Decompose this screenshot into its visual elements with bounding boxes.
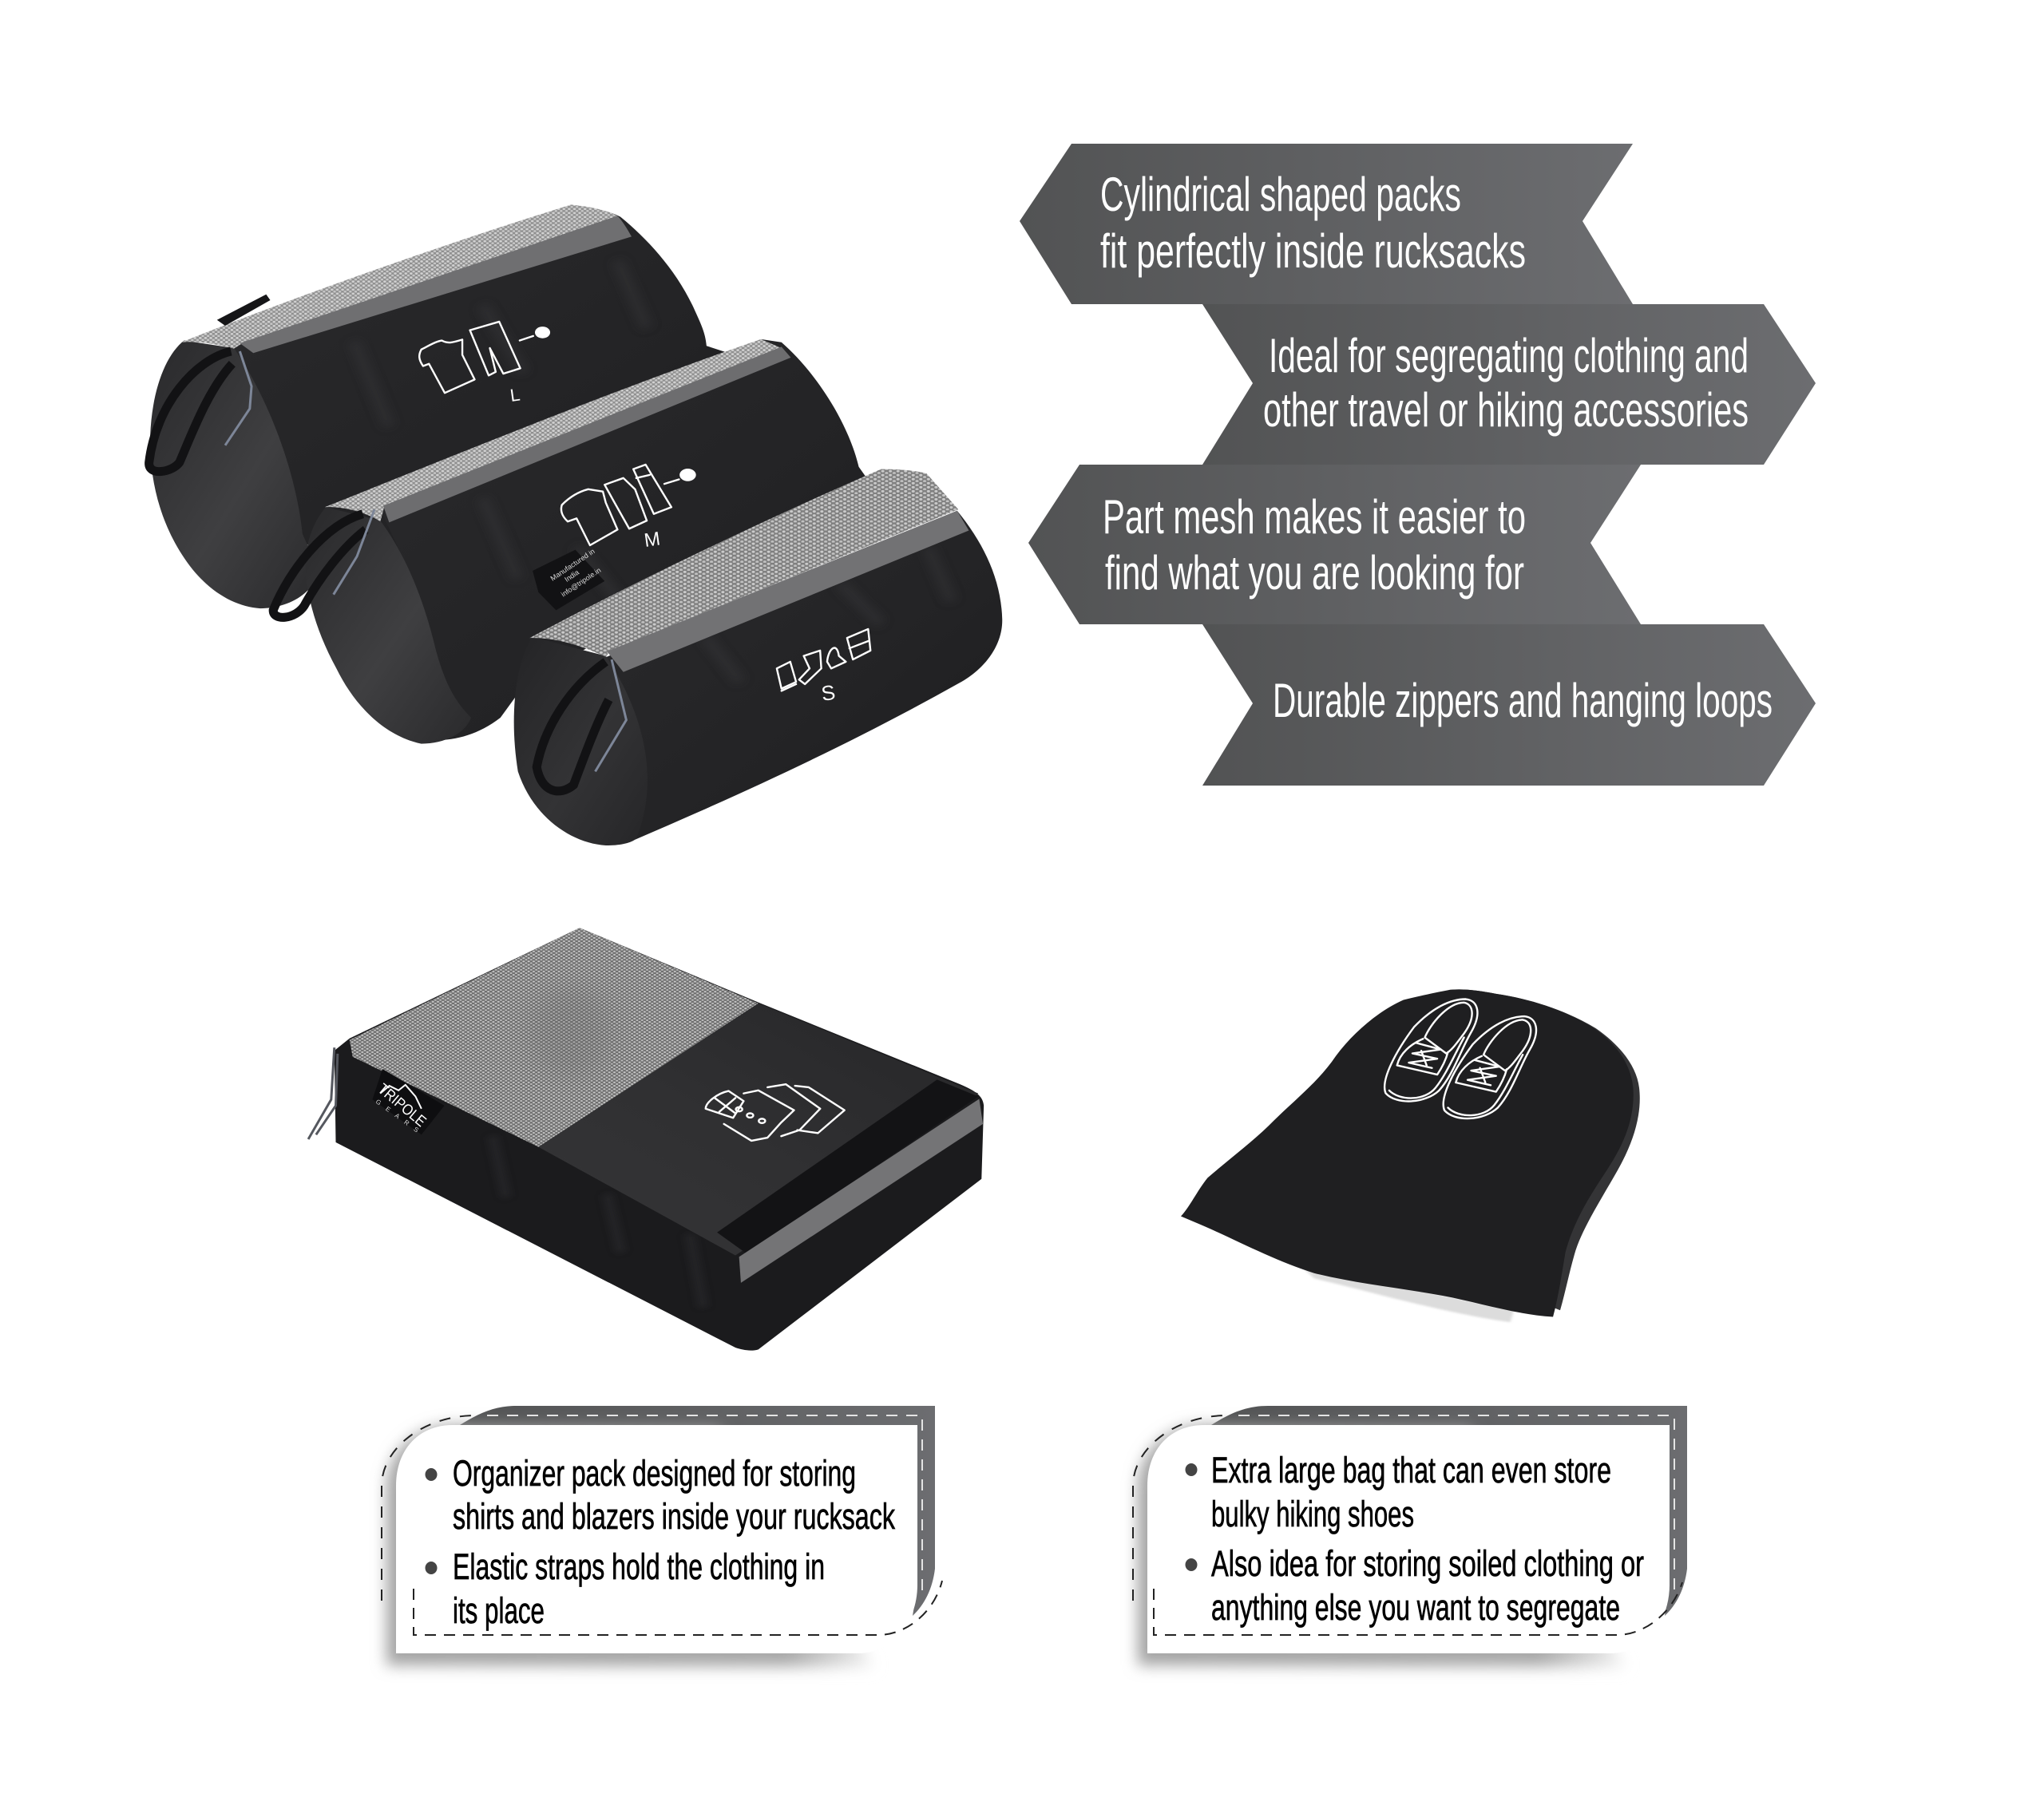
arrow 1 bbox=[1020, 144, 1633, 304]
organizer dark top bbox=[538, 1004, 978, 1255]
organizer mesh shade bbox=[529, 987, 612, 1078]
callout panel bbox=[396, 1425, 917, 1653]
arrow 3: Part mesh makes it easier to bbox=[1103, 490, 1526, 544]
callout: organizer: its place bbox=[453, 1590, 545, 1631]
photo: organizer pack bbox=[308, 928, 984, 1351]
callout: organizer: shirts and blazers inside your rucksack bbox=[453, 1496, 895, 1537]
bag S icons bbox=[777, 629, 870, 691]
size label M: M bbox=[643, 528, 662, 552]
shoe left bbox=[1384, 1000, 1477, 1101]
arrow 4 bbox=[1202, 624, 1816, 786]
bag M tag bbox=[533, 550, 604, 610]
organizer tag brand: TRIPOLE bbox=[374, 1081, 429, 1130]
bag L body bbox=[149, 204, 775, 608]
callout: shoe bag: anything else you want to segregate bbox=[1211, 1587, 1620, 1628]
bag M icons bbox=[561, 465, 696, 545]
shoe bag body bbox=[1181, 989, 1634, 1317]
organizer tag sub-brand: GEARS bbox=[374, 1098, 426, 1138]
size label L: L bbox=[509, 384, 521, 406]
organizer mesh bbox=[350, 928, 759, 1147]
bag S body bbox=[514, 469, 1002, 845]
organizer shirt icon bbox=[706, 1084, 845, 1141]
callout: shoe bag bbox=[1133, 1406, 1687, 1667]
photo: three cylindrical packs bbox=[149, 204, 1002, 845]
callout band bbox=[460, 1406, 935, 1616]
tag text: info@tripole.in bbox=[560, 566, 602, 599]
organizer cord bbox=[308, 1047, 338, 1139]
tag text: India bbox=[563, 568, 580, 584]
callout shadow bbox=[1138, 1425, 1626, 1667]
arrow 2: other travel or hiking accessories bbox=[1263, 383, 1749, 437]
arrow 4: Durable zippers and hanging loops bbox=[1273, 674, 1773, 727]
arrow 3 bbox=[1028, 465, 1641, 624]
callout: organizer: Elastic straps hold the clothing in bbox=[453, 1546, 825, 1587]
organizer elastic strap bbox=[717, 1079, 978, 1254]
organizer front creases bbox=[493, 1136, 703, 1308]
bag L icons bbox=[419, 322, 550, 393]
callout: shoe bag: bulky hiking shoes bbox=[1211, 1494, 1414, 1534]
callout: shoe bag: Extra large bag that can even store bbox=[1211, 1450, 1611, 1490]
arrow 3: find what you are looking for bbox=[1105, 546, 1524, 600]
photo: shoe bag bbox=[1181, 989, 1640, 1322]
organizer tag bbox=[372, 1069, 445, 1134]
arrow 2 bbox=[1202, 304, 1816, 465]
bag M body bbox=[273, 339, 881, 744]
callout band bbox=[1211, 1406, 1687, 1616]
shoe bag floor shade bbox=[1300, 1265, 1514, 1322]
organizer silhouette bbox=[335, 928, 984, 1351]
tag text: Manufactured in bbox=[549, 547, 596, 583]
shoe right bbox=[1444, 1016, 1536, 1118]
callout panel bbox=[1147, 1425, 1670, 1653]
callout: shoe bag: Also idea for storing soiled clothing or bbox=[1211, 1543, 1644, 1584]
callout shadow bbox=[386, 1425, 874, 1667]
arrow 1: Cylindrical shaped packs bbox=[1100, 168, 1461, 221]
shoe bag side bbox=[1407, 989, 1640, 1310]
callout: organizer: Organizer pack designed for storing bbox=[453, 1453, 856, 1494]
organizer zipper band bbox=[739, 1099, 983, 1283]
size label S: S bbox=[820, 680, 837, 706]
arrow 2: Ideal for segregating clothing and bbox=[1269, 329, 1749, 382]
callout: organizer bbox=[382, 1406, 942, 1667]
arrow 1: fit perfectly inside rucksacks bbox=[1100, 224, 1526, 278]
